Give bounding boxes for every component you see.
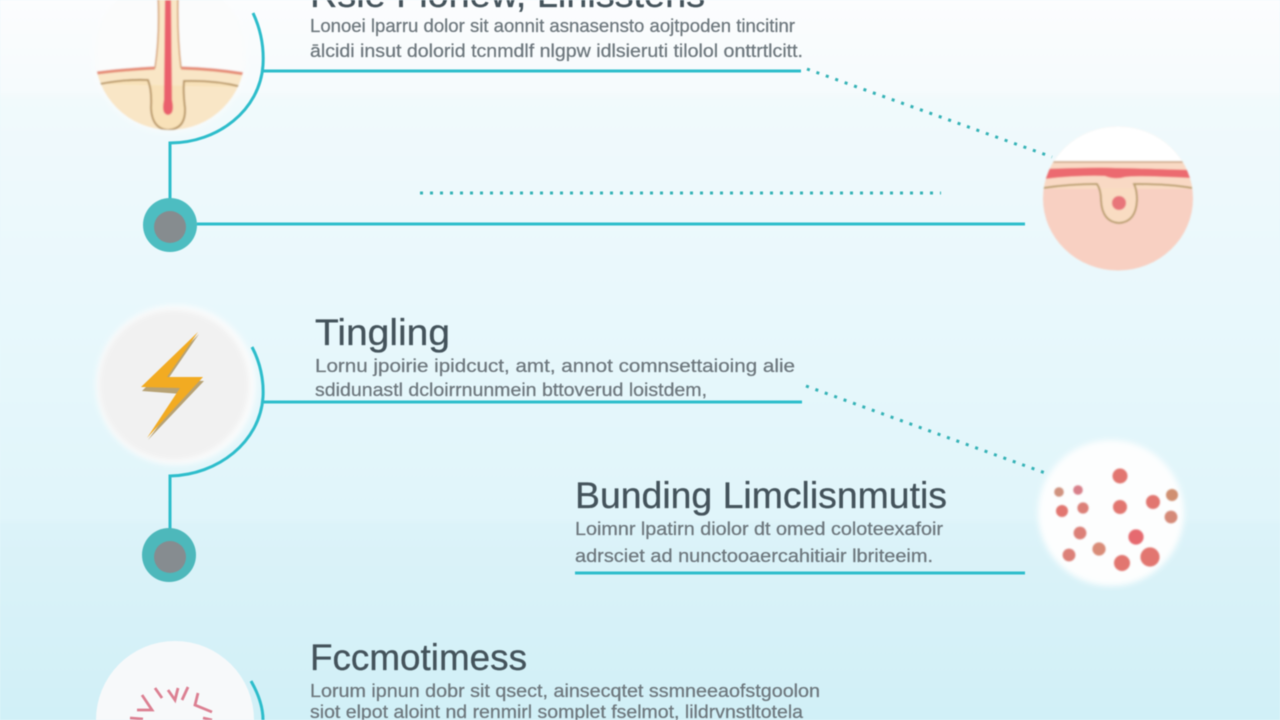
text block: rash line 2: ālcidi insut dolorid tcnmdlf nlgpw idlsieruti tilolol onttrtlcitt. xyxy=(310,41,803,61)
dotted connector diagonal xyxy=(806,386,1048,474)
icon: hair follicle xyxy=(96,0,244,132)
section: tingling xyxy=(96,305,1048,582)
text block: numbness line 1: Lorum ipnun dobr sit qsect, ainsecqtet ssmneeaofstgoolon xyxy=(310,681,820,701)
section: burning xyxy=(575,440,1184,586)
text block: rash line 1: Lonoei lparru dolor sit aonnit asnasensto aojtpoden tincitinr xyxy=(310,16,795,36)
connector arc xyxy=(251,681,263,720)
text block: burning line 1: Loimnr lpatirn diolor dt omed coloteexafoir xyxy=(575,519,943,539)
connector arc and rule xyxy=(170,347,802,530)
heading: burning: Bunding Limclisnmutis xyxy=(575,475,947,516)
text block: tingling line 2: sdidunastl dcloirrnunmein bttoverud loistdem, xyxy=(315,380,707,400)
section: numbness xyxy=(96,637,820,720)
heading: tingling: Tingling xyxy=(315,312,450,353)
node: grey dot 2 xyxy=(142,528,196,582)
icon: red rash dots xyxy=(1038,440,1184,586)
connector rule to skin bump xyxy=(197,222,1025,226)
heading: numbness: Fccmotimess xyxy=(310,637,527,678)
text block: burning line 2: adrsciet ad nunctooaercahitiair lbriteeim. xyxy=(575,546,933,566)
icon: lightning bolt xyxy=(96,305,256,465)
icon: skin bump xyxy=(1040,120,1200,270)
section: rash and blisters xyxy=(90,0,1200,270)
node: grey dot 1 xyxy=(143,198,197,252)
text block: tingling line 1: Lornu jpoirie ipidcuct, amt, annot comnsettaioing alie xyxy=(315,356,795,376)
connector rule xyxy=(575,572,1025,574)
dotted connector diagonal xyxy=(807,69,1052,157)
icon: red pain burst xyxy=(96,641,254,720)
dotted connector horizontal xyxy=(420,192,941,194)
connector arc and rule xyxy=(170,13,801,200)
